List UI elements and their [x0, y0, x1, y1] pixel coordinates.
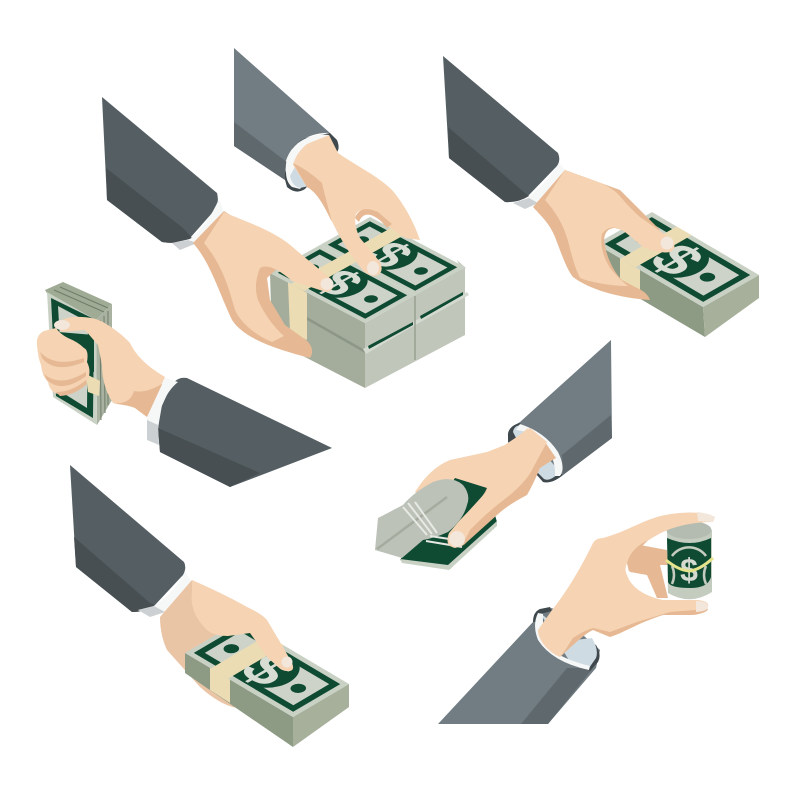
- panel: hand holding bundle, top right: [443, 56, 759, 337]
- sleeve: bottom right arm: [438, 607, 600, 724]
- panel: fist holding upright bundle: [37, 282, 332, 487]
- hand: upper hand on stack: [293, 135, 420, 276]
- money: folded bundle: [375, 478, 497, 570]
- sleeve: centre right arm: [508, 340, 612, 482]
- money: roll: $: [680, 552, 698, 588]
- sleeve: bottom left arm: [70, 465, 192, 617]
- hand: back fingers: [627, 545, 668, 598]
- money: single bundle: [595, 212, 759, 337]
- hand: fist: [37, 317, 168, 417]
- panel: two hands on big double stack: [102, 48, 469, 388]
- panel: fingers pinching money roll: [438, 512, 715, 724]
- money: big double stack: [269, 217, 469, 388]
- sleeve: horizontal dark arm: [147, 378, 332, 487]
- bill: back bundle: [319, 217, 465, 296]
- hand: thumb and heel of centre right hand: [447, 428, 556, 548]
- sleeve: upper grey arm: [234, 48, 339, 192]
- bill: top of bundle: $: [634, 235, 719, 284]
- hand: lower hand on stack: [193, 211, 334, 358]
- money: bundle bottom left: [184, 620, 349, 747]
- hand: palm behind bundle: [160, 580, 260, 708]
- sleeve: lower dark arm: [102, 97, 224, 250]
- hand: top right hand: [533, 170, 674, 300]
- panel: hand holding bundle, bottom left: [70, 465, 349, 747]
- bill: front bundle: $: [302, 262, 377, 303]
- panel: hand on folded bundle, centre right: [375, 340, 612, 570]
- bill: back bundle: $: [352, 234, 427, 275]
- money: upright bundle: [45, 282, 112, 425]
- money: roll: [666, 521, 713, 599]
- bill: top of bundle: [595, 212, 759, 308]
- hand: thumb and index finger: [538, 512, 715, 657]
- sleeve: top right arm: [443, 56, 565, 209]
- hand: palm and thumb over bundle: [192, 580, 293, 671]
- hand: back of hand behind bundle: [415, 428, 528, 510]
- bill: top of bundle: $: [225, 645, 310, 695]
- bill: top of bundle: [184, 620, 349, 718]
- bill: front bundle: [269, 245, 415, 324]
